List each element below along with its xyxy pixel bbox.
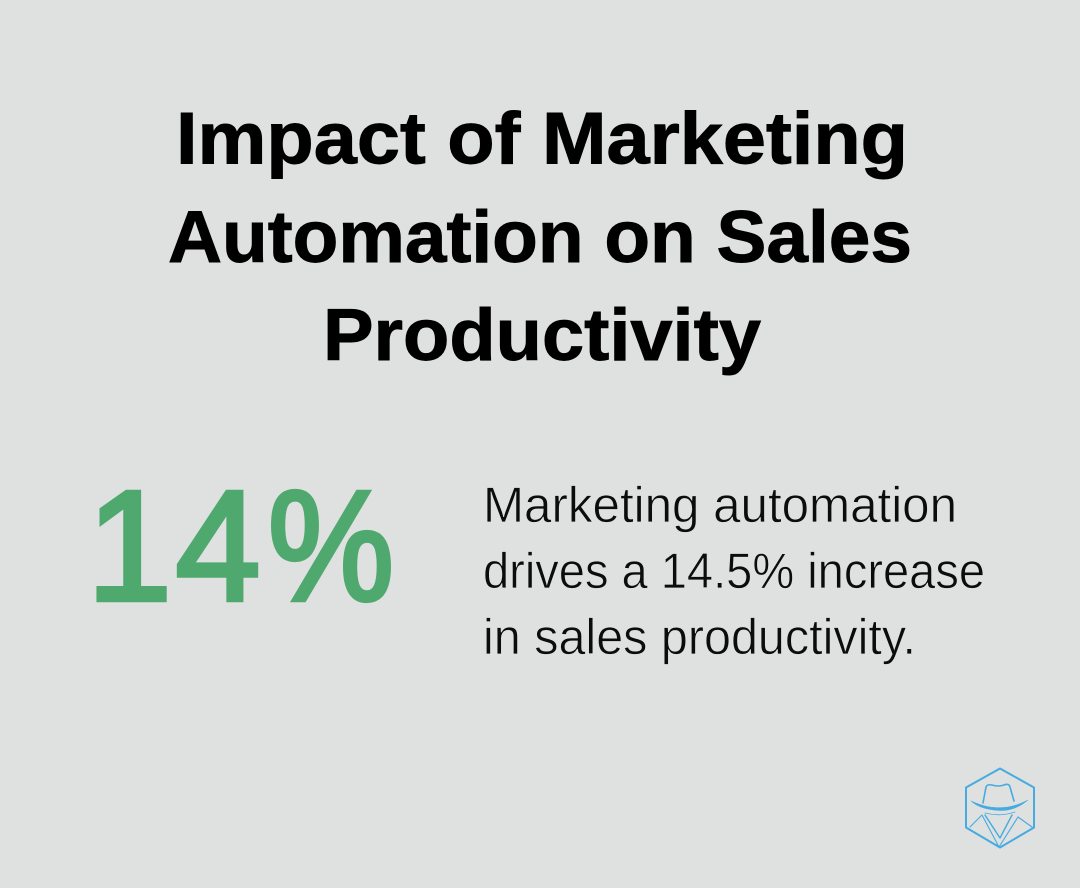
title: Automation on Sales — [168, 197, 912, 278]
big stat: 14% — [87, 459, 394, 634]
stat description: in sales productivity. — [483, 609, 916, 665]
title: Productivity — [323, 295, 761, 376]
icon: hexagon logo with hat and spy — [966, 768, 1034, 848]
big stat: 14%: 1 — [87, 459, 172, 634]
big stat: 14%: 4 — [176, 459, 260, 634]
title: Impact of Marketing — [176, 98, 908, 180]
title — [168, 98, 912, 376]
stat description — [483, 477, 985, 665]
big stat: 14%: % — [268, 459, 394, 634]
stat description: Marketing automation — [483, 477, 957, 533]
stat description: drives a 14.5% increase — [483, 543, 985, 599]
